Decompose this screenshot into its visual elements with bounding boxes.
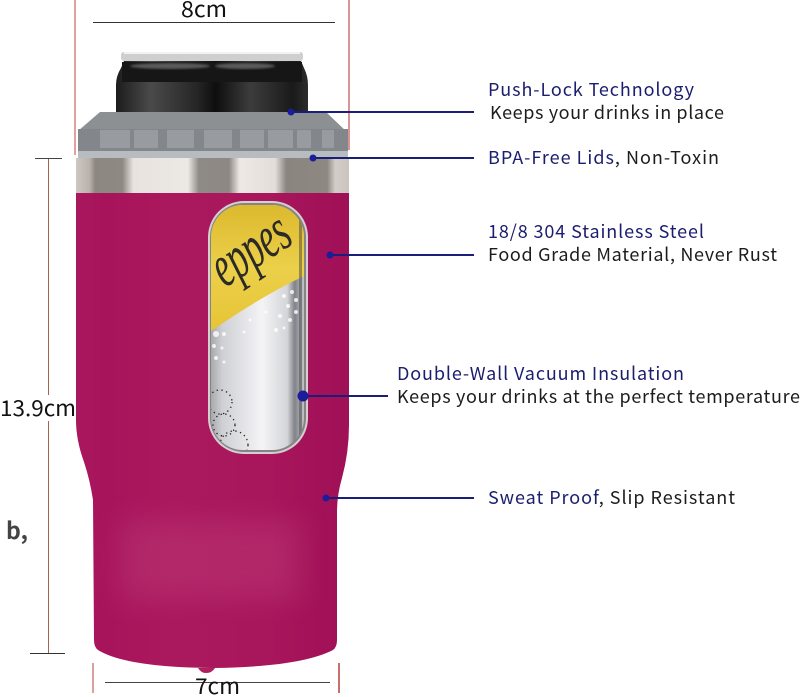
dimension: 13.9cm height: 13.9cm — [0, 391, 76, 423]
callout: Stainless Steel — [326, 218, 777, 267]
callout: Push-Lock Technology: Keeps your drinks in place — [490, 99, 724, 125]
callout: Push-Lock Technology: Push-Lock Technology — [488, 76, 695, 102]
callout: Stainless Steel: Food Grade Material, Never Rust — [488, 241, 777, 267]
callout: Double-Wall Vacuum Insulation: Keeps your drinks at the perfect temperature — [397, 383, 800, 409]
yellow label — [211, 205, 304, 331]
callout: Sweat Proof: Sweat Proof, Slip Resistant — [488, 484, 735, 510]
can top — [116, 52, 308, 112]
bubble dots — [212, 290, 298, 364]
window showing can — [208, 201, 308, 454]
callout: BPA-Free Lids — [310, 144, 719, 170]
dimension: 13.9cm height — [0, 158, 76, 654]
eppes logo: eppes — [196, 198, 303, 299]
tumbler — [76, 52, 349, 673]
callout: Double-Wall Vacuum Insulation: Double-Wall Vacuum Insulation — [397, 360, 684, 386]
callout: Double-Wall Vacuum Insulation — [298, 360, 800, 409]
magenta body — [76, 193, 349, 668]
callout: BPA-Free Lids: BPA-Free Lids, Non-Toxin — [488, 144, 719, 170]
callout: Sweat Proof — [322, 484, 735, 510]
callout: Stainless Steel: 18/8 304 Stainless Steel — [488, 218, 704, 244]
base nub — [198, 668, 215, 673]
dotted circles — [211, 389, 249, 450]
grey lid — [78, 112, 348, 158]
callout: Push-Lock Technology — [288, 76, 724, 125]
stray label b,: b, — [6, 512, 28, 546]
body lower highlight — [120, 520, 300, 600]
steel band — [76, 158, 349, 193]
